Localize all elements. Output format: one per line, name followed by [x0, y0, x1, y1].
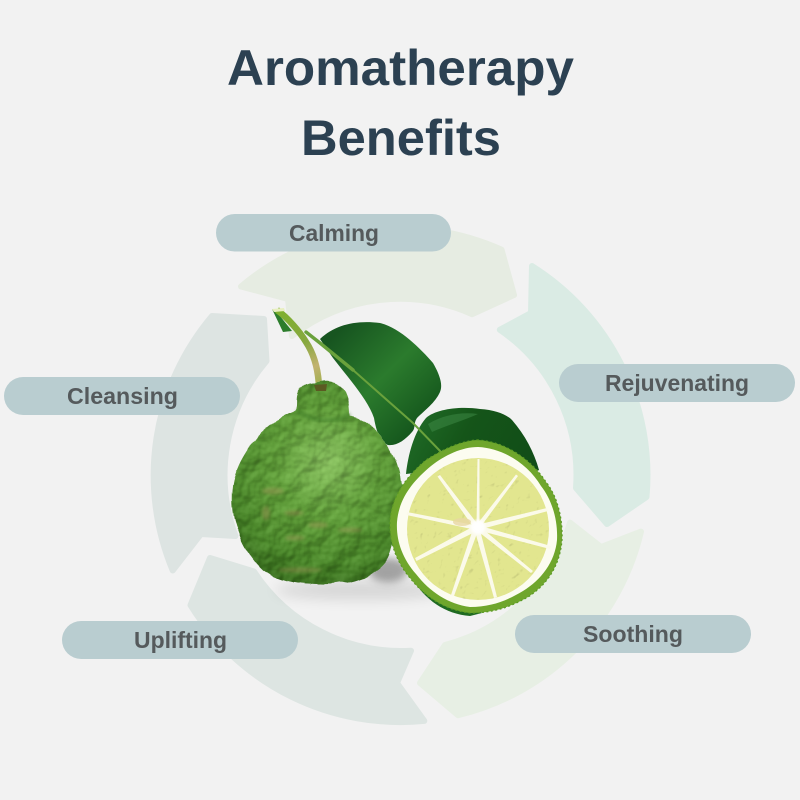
front leaf — [320, 322, 441, 445]
label pills — [4, 214, 795, 659]
pill: Cleansing: Cleansing — [67, 383, 178, 409]
arrow: calming segment — [241, 228, 514, 336]
core — [469, 518, 487, 536]
pill: Uplifting: Uplifting — [134, 627, 227, 653]
pill: Rejuvenating — [559, 364, 795, 402]
pulp — [407, 458, 549, 600]
membrane spokes — [406, 459, 551, 598]
back leaf — [406, 408, 539, 480]
title: Aromatherapy — [227, 40, 574, 96]
title: Benefits — [301, 110, 501, 166]
arrow: soothing segment — [420, 523, 641, 715]
pill: Cleansing — [4, 377, 240, 415]
green rim — [390, 440, 562, 613]
arrow: rejuvenating segment — [500, 266, 647, 524]
pill: Soothing — [515, 615, 751, 653]
cut half of bergamot — [390, 440, 562, 616]
pill: Rejuvenating: Rejuvenating — [605, 370, 749, 396]
cycle of five arrows — [154, 228, 647, 722]
arrow: cleansing segment — [154, 316, 266, 570]
russet patches on the skin — [262, 488, 362, 572]
pill: Calming: Calming — [289, 220, 379, 246]
title — [227, 40, 574, 166]
leaf midrib — [306, 332, 442, 453]
core fibres — [453, 518, 471, 526]
stem and petiole — [272, 308, 319, 386]
arrow: uplifting segment — [190, 558, 424, 722]
whole bumpy bergamot — [232, 381, 403, 585]
leaf highlight — [428, 413, 478, 432]
outer peel — [412, 578, 482, 616]
white pith — [397, 447, 557, 607]
pill: Soothing: Soothing — [583, 621, 683, 647]
pill: Uplifting — [62, 621, 298, 659]
stem base — [314, 384, 327, 391]
pill: Calming — [216, 214, 451, 252]
shaded crease under the neck — [297, 410, 350, 420]
fruit shadow — [275, 558, 445, 599]
bergamot fruit illustration — [232, 308, 562, 616]
